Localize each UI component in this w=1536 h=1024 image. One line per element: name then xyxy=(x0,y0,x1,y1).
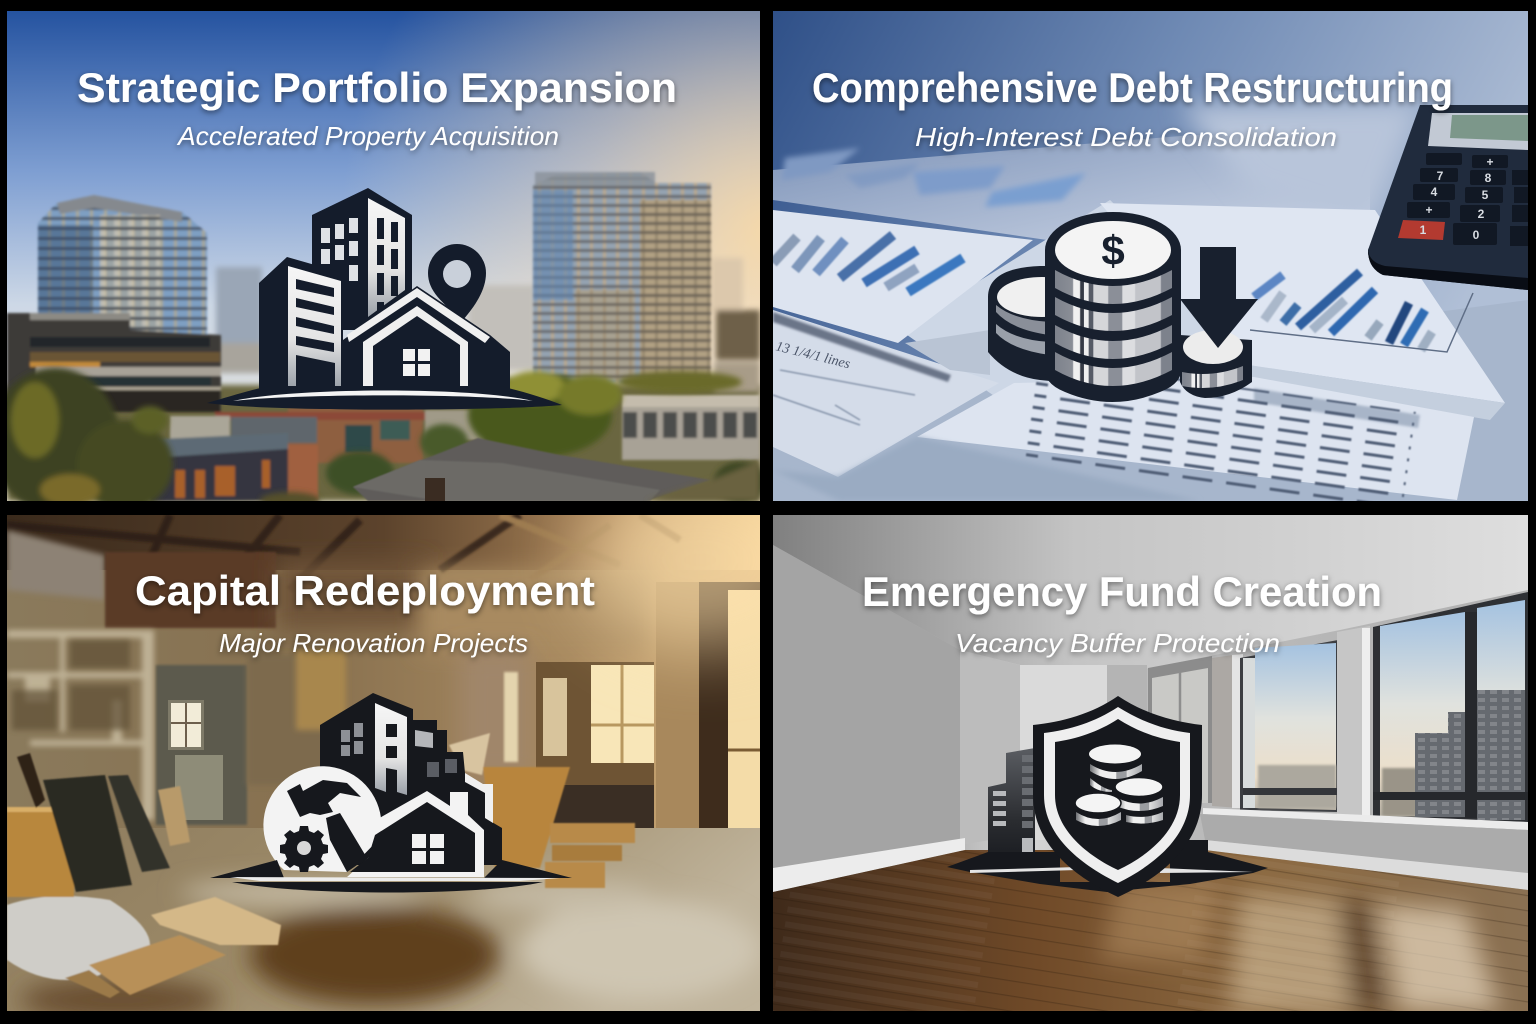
calculator: 7 xyxy=(1437,169,1444,183)
calculator: 8 xyxy=(1485,171,1492,185)
empty apartment photo xyxy=(773,515,1528,1011)
icon: coin stacks with down arrow xyxy=(988,212,1258,402)
subheading: Major Renovation Projects xyxy=(219,628,528,658)
subheading: Accelerated Property Acquisition xyxy=(176,121,559,151)
heading: Capital Redeployment xyxy=(135,567,595,614)
wall outlet xyxy=(1261,823,1269,833)
calculator: + xyxy=(1425,203,1433,217)
renovation site photo xyxy=(7,515,760,1011)
financial documents and calculator photo xyxy=(773,11,1528,516)
calculator: 0 xyxy=(1473,228,1480,242)
panel: strategic portfolio expansion xyxy=(0,11,766,512)
icon: coin stacks with down arrow: $ xyxy=(1101,227,1125,274)
bright windows xyxy=(536,582,760,828)
calculator: + xyxy=(1486,155,1494,169)
calculator: 1 xyxy=(1420,223,1427,237)
heading: Comprehensive Debt Restructuring xyxy=(812,64,1453,111)
financial documents and calculator photo: 13 1/4/1 lines xyxy=(774,339,852,372)
city skyline photo xyxy=(0,11,766,512)
subheading: Vacancy Buffer Protection xyxy=(955,628,1280,658)
heading: Strategic Portfolio Expansion xyxy=(77,64,677,111)
panel: emergency fund creation xyxy=(773,515,1528,1011)
panel: comprehensive debt restructuring xyxy=(773,11,1528,516)
panel: capital redeployment xyxy=(7,515,760,1011)
calculator xyxy=(1368,105,1528,290)
calculator: 5 xyxy=(1482,188,1489,202)
icon: buildings, hammer, gear and house xyxy=(210,693,572,892)
icon: buildings, house and map pin xyxy=(207,188,562,410)
rubble and wood piles xyxy=(7,733,635,998)
calculator: 2 xyxy=(1478,207,1485,221)
subheading: High-Interest Debt Consolidation xyxy=(915,122,1337,152)
coins xyxy=(1075,744,1163,826)
windows and city view xyxy=(1148,592,1528,830)
icon: shield with coins and building xyxy=(947,696,1268,897)
small window xyxy=(168,700,204,750)
heading: Emergency Fund Creation xyxy=(862,568,1382,615)
calculator: 4 xyxy=(1431,185,1438,199)
